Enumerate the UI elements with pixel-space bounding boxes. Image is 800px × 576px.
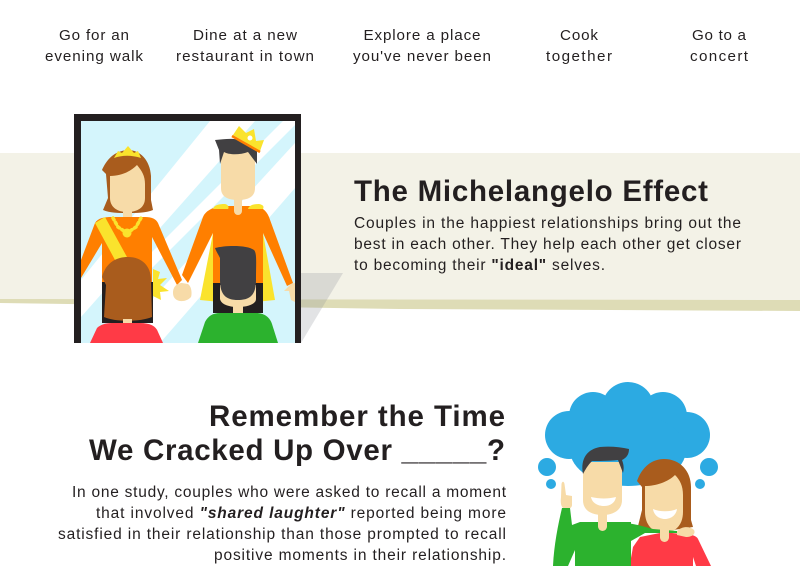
heading: Remember the Time: We Cracked Up Over _____? — [89, 434, 505, 467]
reflected king — [182, 126, 293, 313]
activity: cook together: together — [546, 48, 612, 65]
activity: cook together — [546, 27, 612, 65]
foreground woman from behind — [90, 257, 163, 343]
heading: Remember the Time — [89, 400, 505, 467]
heading: The Michelangelo Effect: The Michelangelo Effect — [354, 175, 708, 208]
text: shared laughter study — [58, 484, 507, 564]
illustration: mirror with couple — [74, 114, 301, 343]
text: Michelangelo description: best in each other. They help each other get closer — [354, 236, 741, 253]
activity: explore a place: Explore a place — [364, 27, 480, 44]
activity: explore a place — [353, 27, 491, 65]
activity: cook together: Cook — [560, 27, 598, 44]
woman's neck — [660, 524, 669, 542]
thought cloud — [538, 382, 718, 489]
woman — [631, 459, 711, 566]
activity: evening walk: evening walk — [45, 48, 143, 65]
activity: new restaurant: Dine at a new — [193, 27, 297, 44]
man — [553, 447, 631, 566]
text: shared laughter study: positive moments in their relationship. — [214, 547, 506, 564]
activity: evening walk: Go for an — [59, 27, 129, 44]
foreground hands — [173, 283, 295, 302]
activity: concert: Go to a — [692, 27, 747, 44]
heading: Remember the Time: Remember the Time — [209, 400, 505, 433]
mirror shadow — [301, 273, 343, 343]
text: Michelangelo description: to becoming their "ideal" selves. — [354, 257, 605, 274]
activity: new restaurant: restaurant in town — [176, 48, 314, 65]
illustration: laughing couple with thought cloud — [538, 382, 718, 566]
text: shared laughter study: that involved "shared laughter" reported being more — [96, 505, 506, 522]
activity: concert: concert — [690, 48, 749, 65]
text: Michelangelo description: Couples in the happiest relationships bring out the — [354, 215, 741, 232]
man's hand on shoulder — [677, 527, 695, 537]
activity: evening walk — [45, 27, 143, 65]
activity: concert — [690, 27, 749, 65]
mirror glare — [81, 121, 295, 343]
reflected queen — [81, 146, 182, 323]
man's arm around woman — [622, 522, 677, 545]
foreground man from behind — [198, 246, 278, 343]
text: shared laughter study: satisfied in their relationship than those prompted to recall — [58, 526, 506, 543]
text: shared laughter study: In one study, couples who were asked to recall a moment — [72, 484, 507, 501]
text: Michelangelo description — [354, 215, 741, 274]
band: beige background — [0, 153, 800, 311]
activity: new restaurant — [176, 27, 314, 65]
activity: explore a place: you've never been — [353, 48, 491, 65]
